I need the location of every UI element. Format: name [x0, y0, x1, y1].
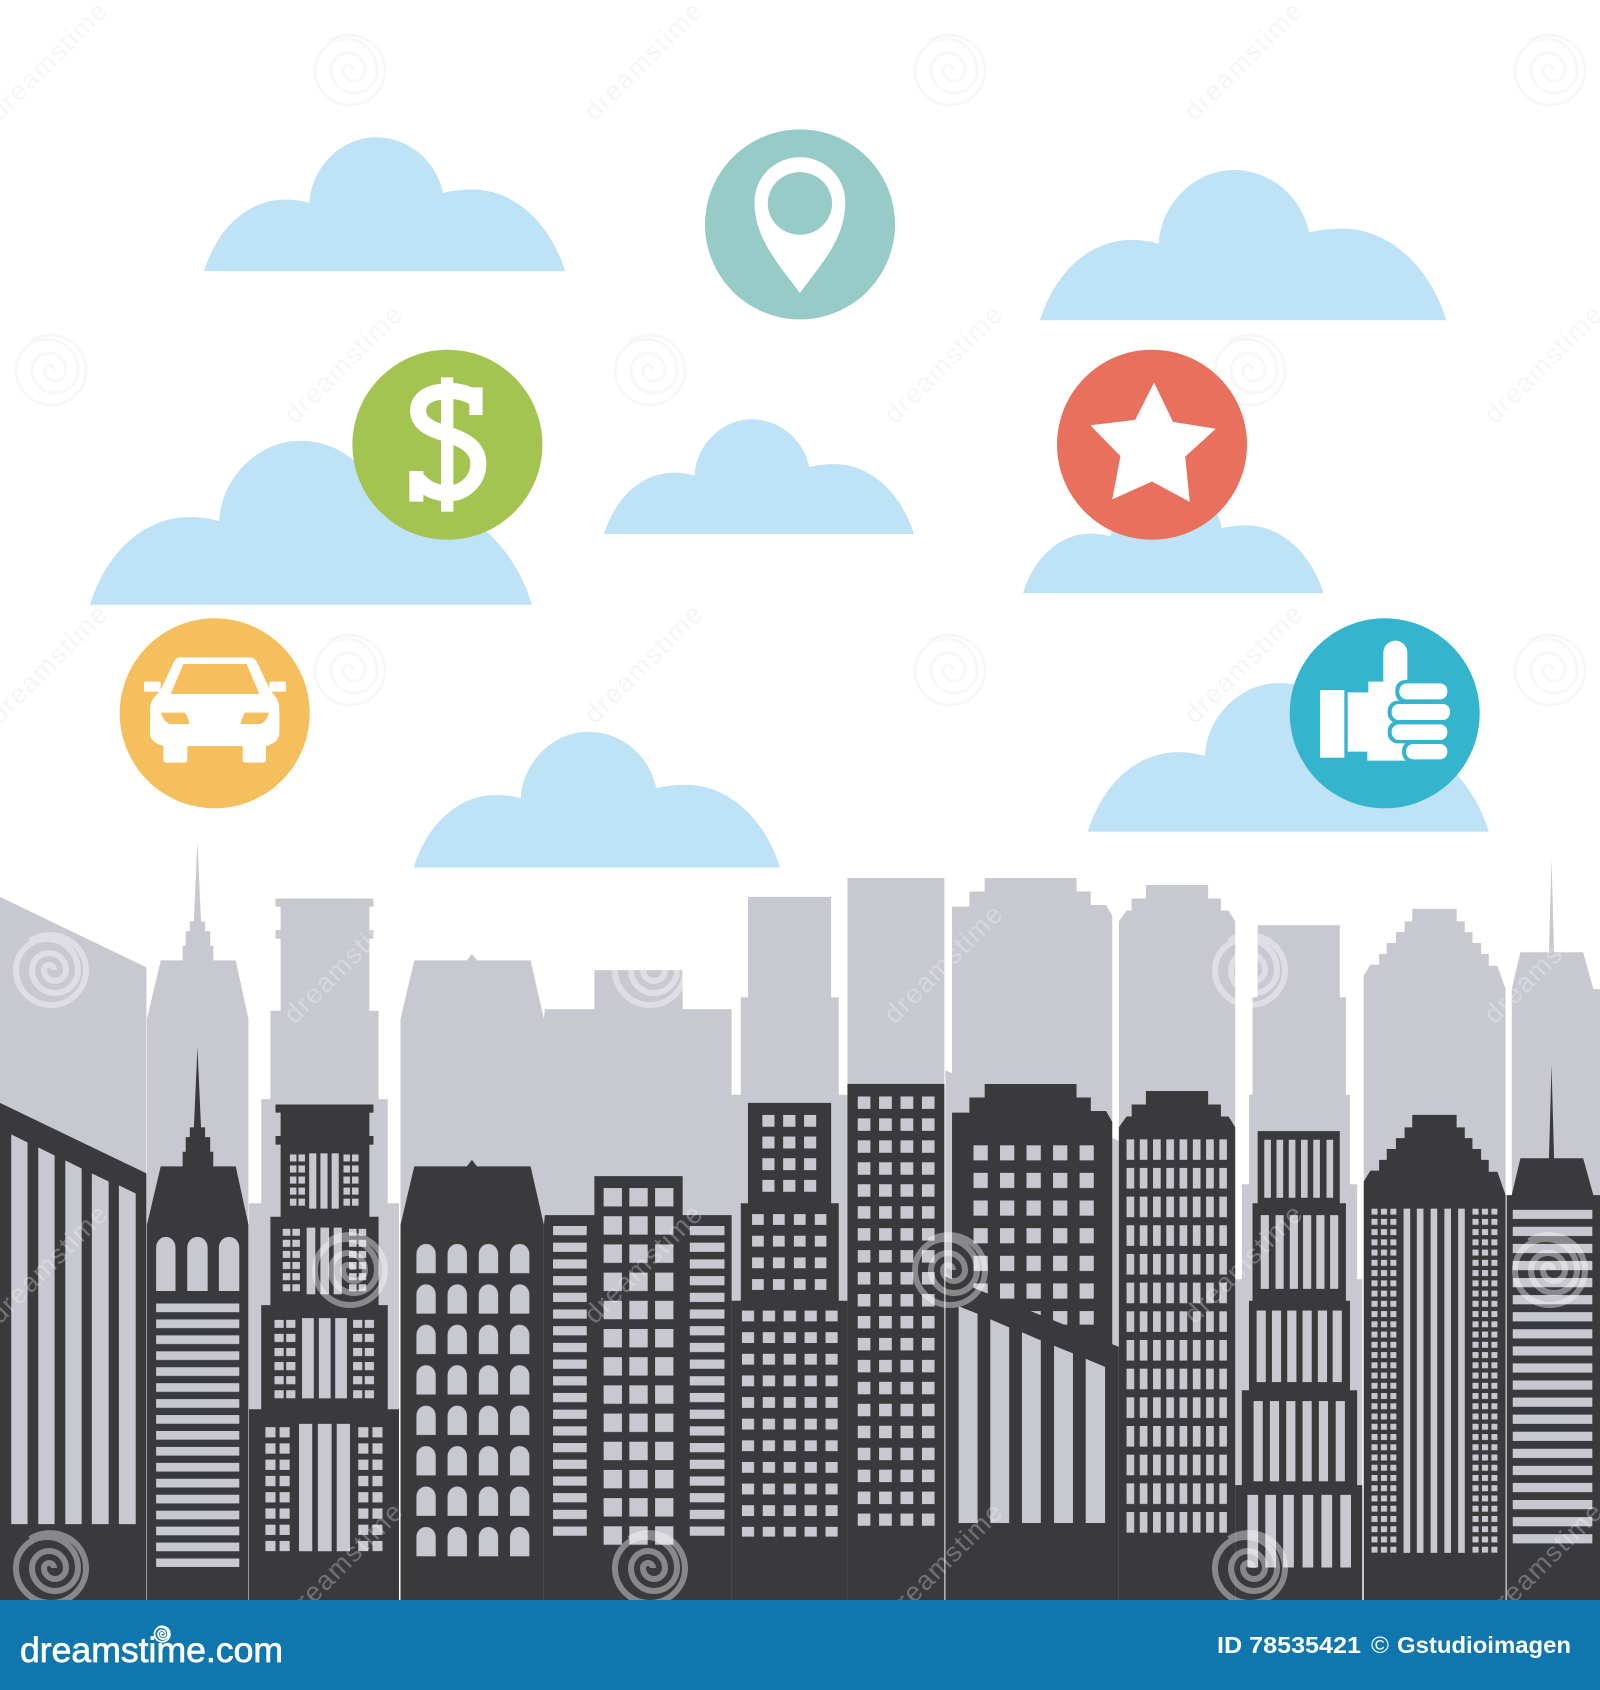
city watermark: dreamstime	[1178, 1198, 1309, 1329]
sky watermark	[0, 0, 1600, 729]
cloud: behind thumb	[1088, 683, 1489, 832]
sky watermark: dreamstime	[1178, 598, 1309, 729]
city skyline	[0, 841, 1600, 1604]
building: slanted left	[0, 1103, 146, 1600]
back skyline silhouette	[0, 841, 1600, 1604]
building: stepped dome grid	[952, 1084, 1112, 1600]
building: ziggurat stripes	[1235, 1131, 1362, 1600]
footer bar	[0, 1600, 1600, 1690]
cloud: large left	[90, 441, 532, 605]
cloud: behind star	[1023, 482, 1323, 593]
icon: thumbs up	[1290, 618, 1480, 808]
building: right spire	[1507, 1065, 1600, 1600]
city watermark: dreamstime	[878, 898, 1009, 1029]
footer credit: id: ID 78535421	[1217, 1632, 1361, 1658]
cloud: center	[604, 419, 914, 534]
sky watermark: dreamstime	[278, 298, 409, 429]
icon: car	[120, 618, 310, 808]
building: tiered tower	[249, 1105, 399, 1600]
clouds	[90, 137, 1489, 868]
footer logo swirl	[155, 1626, 170, 1642]
building: stepped grid tower	[732, 1103, 847, 1600]
city watermark: dreamstime	[878, 1496, 1009, 1627]
sky watermark: dreamstime	[578, 598, 709, 729]
footer credit: copyright: ©	[1371, 1632, 1389, 1658]
city watermark	[0, 898, 1600, 1627]
city watermark: dreamstime	[278, 898, 409, 1029]
footer logo text: dreamstime.com	[20, 1631, 283, 1670]
building: arched windows	[401, 1160, 544, 1600]
building: twin wing block	[544, 1176, 732, 1600]
cloud: top left	[204, 137, 565, 271]
footer credit: author: Gstudioimagen	[1397, 1632, 1571, 1658]
sky watermark: dreamstime	[878, 298, 1009, 429]
icon: star	[1057, 350, 1247, 540]
building: stepped pyramid	[1364, 1115, 1506, 1600]
icon: dollar	[352, 350, 542, 540]
city watermark: dreamstime	[278, 1496, 409, 1627]
building: slanted front	[945, 1276, 1119, 1600]
building: spire tower	[147, 1047, 248, 1600]
icon: location pin	[705, 129, 895, 319]
building: tall square windows	[847, 1084, 944, 1600]
cloud: lower center	[414, 732, 780, 868]
cloud: top right	[1040, 170, 1446, 320]
building: stepped double windows	[1119, 1091, 1235, 1600]
city watermark: dreamstime	[578, 1198, 709, 1329]
